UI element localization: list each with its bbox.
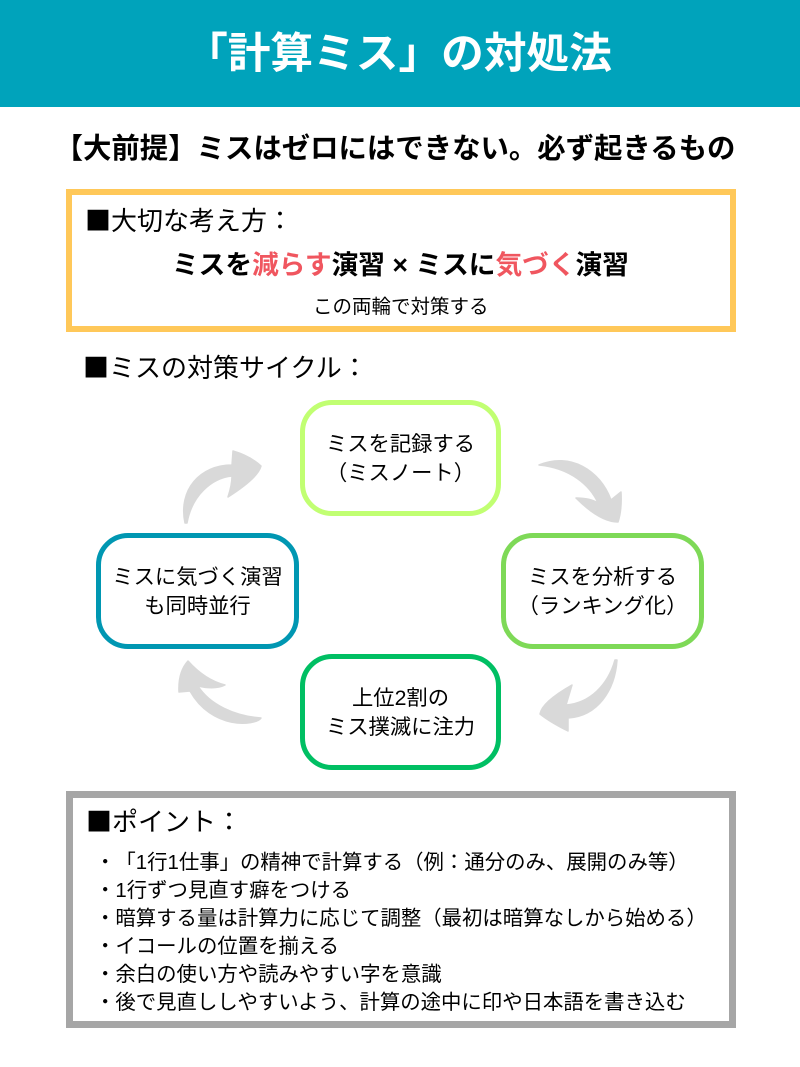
points heading: ■ポイント：: [86, 802, 242, 839]
node: analyze mistakes: （ランキング化）: [518, 594, 687, 618]
node: record mistakes: ミスを記録する: [326, 432, 475, 456]
mindset heading: ■大切な考え方：: [85, 201, 293, 238]
points list: [95, 852, 707, 1014]
node: analyze mistakes: [501, 533, 704, 649]
arrow: analyze to focus: [540, 660, 617, 731]
panel: points: [66, 791, 736, 1028]
arrow: focus to noticing: [179, 661, 261, 723]
arrow: record to analyze: [539, 461, 621, 522]
node: record mistakes: （ミスノート）: [326, 461, 475, 485]
node: noticing practice: ミスに気づく演習: [112, 565, 283, 589]
panel: key mindset: [66, 189, 736, 332]
points list: ・余白の使い方や読みやすい字を意識: [95, 964, 442, 986]
node: record mistakes: [300, 400, 501, 516]
title: 「計算ミス」の対処法: [185, 30, 612, 78]
node: focus on top 20 percent: ミス撲滅に注力: [326, 715, 475, 739]
points list: ・1行ずつ見直す癖をつける: [95, 880, 351, 902]
points list: ・「1行1仕事」の精神で計算する（例：通分のみ、展開のみ等）: [95, 852, 689, 874]
points list: ・後で見直ししやすいよう、計算の途中に印や日本語を書き込む: [95, 992, 686, 1014]
points list: ・暗算する量は計算力に応じて調整（最初は暗算なしから始める）: [95, 908, 707, 930]
cycle diagram: [96, 400, 704, 770]
mindset formula: ミスを減らす演習 × ミスに気づく演習: [172, 250, 629, 280]
node: focus on top 20 percent: 上位2割の: [352, 686, 449, 710]
header banner: [0, 0, 800, 107]
arrow: noticing to record: [184, 451, 261, 523]
node: analyze mistakes: ミスを分析する: [528, 565, 677, 589]
node: noticing practice: も同時並行: [144, 594, 251, 618]
mindset note: この両輪で対策する: [313, 296, 489, 318]
premise heading: 【大前提】ミスはゼロにはできない。必ず起きるもの: [55, 133, 735, 165]
node: noticing practice: [96, 533, 299, 649]
cycle heading: ■ミスの対策サイクル：: [83, 348, 368, 385]
node: focus on top 20 percent: [300, 654, 501, 770]
points list: ・イコールの位置を揃える: [95, 936, 339, 958]
